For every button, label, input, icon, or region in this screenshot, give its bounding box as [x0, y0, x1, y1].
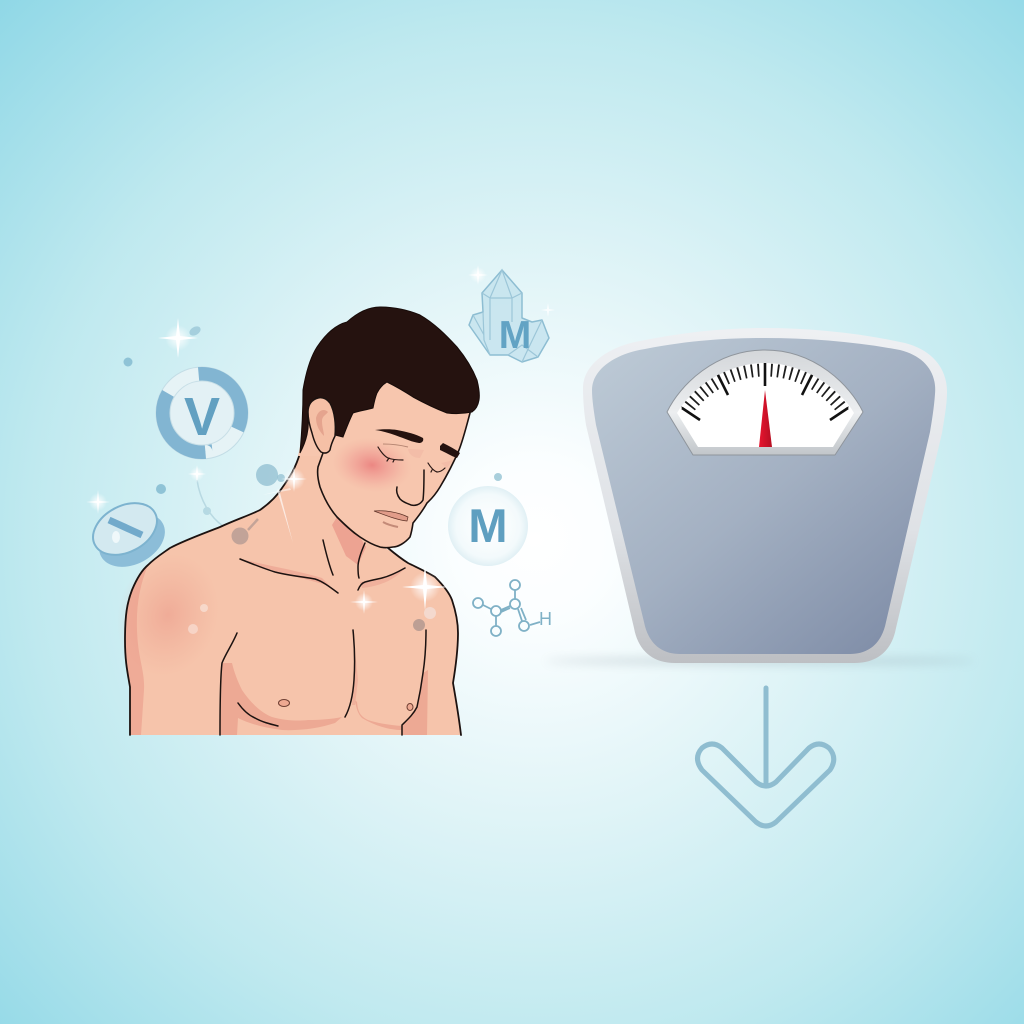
nose — [397, 470, 424, 505]
scale body rim — [583, 328, 947, 663]
icon: molecule diagram: H — [539, 609, 552, 629]
scale body plate — [592, 338, 935, 654]
decorative floating dots and trail — [124, 325, 502, 526]
hair — [300, 307, 479, 453]
torso shading — [104, 517, 428, 735]
dial housing — [667, 350, 863, 455]
ear — [308, 398, 335, 453]
sparkles — [86, 265, 555, 614]
minor ticks — [686, 370, 844, 411]
icon: mineral crystal with M — [469, 270, 549, 362]
right eyebrow — [440, 443, 460, 458]
eye shading — [408, 449, 453, 468]
torso outline — [125, 453, 461, 735]
icon: vitamin V ring: V — [184, 387, 220, 447]
torso — [125, 453, 461, 735]
person: sad shirtless man — [104, 307, 479, 735]
icon: molecule diagram — [473, 580, 552, 636]
inner ear — [316, 410, 328, 436]
down arrow — [698, 688, 834, 826]
skin spots — [188, 519, 436, 634]
dial face — [677, 363, 854, 447]
nipples — [278, 700, 413, 710]
icon: mineral M bubble — [448, 486, 528, 566]
scale shadow — [545, 658, 975, 664]
lower lip line — [383, 522, 398, 527]
left eye crease — [383, 444, 408, 447]
left closed eye — [378, 447, 403, 462]
icon: mineral M bubble: M — [468, 499, 508, 552]
icon: mineral crystal with M: M — [499, 314, 531, 357]
needle — [759, 390, 772, 447]
right closed eye — [428, 463, 445, 472]
major ticks — [682, 363, 848, 420]
mouth — [374, 511, 408, 521]
cheek blush — [329, 433, 415, 497]
face and neck skin — [298, 365, 474, 548]
face outline — [318, 413, 470, 548]
icon: vitamin V ring — [156, 367, 248, 459]
arrow chevron — [698, 744, 834, 826]
left eyebrow — [375, 429, 423, 443]
icon: tablet pill — [84, 493, 174, 578]
arrow shaft — [764, 688, 768, 786]
bathroom scale — [583, 328, 947, 663]
chest line details — [220, 540, 426, 735]
